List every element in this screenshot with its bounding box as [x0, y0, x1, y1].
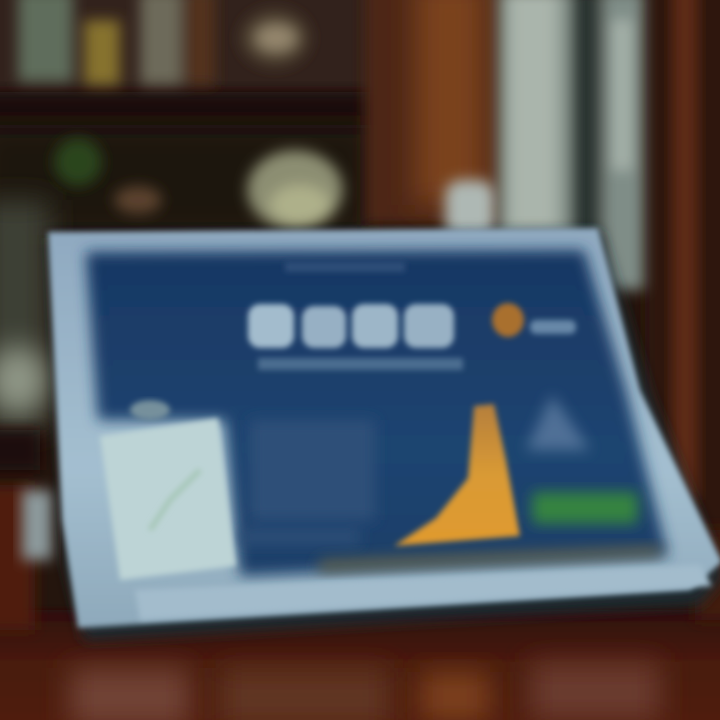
report title [248, 262, 463, 370]
report paper [48, 228, 720, 640]
chart baseline [318, 546, 662, 572]
clipboard note [100, 400, 236, 580]
green button [532, 492, 638, 524]
books on shelf [18, 0, 215, 85]
left-side pale object [0, 346, 48, 414]
blurred body text [240, 420, 375, 544]
plant and objects behind the report [54, 138, 495, 240]
chart: orange area [394, 404, 520, 546]
curtain window [498, 0, 644, 290]
ornament on shelf [241, 10, 309, 66]
paper lower edge [135, 565, 712, 620]
table surface [0, 430, 720, 720]
icon: pale triangle emblem [526, 395, 590, 450]
logo: orange mark [492, 303, 576, 337]
report blue panel [86, 250, 668, 576]
